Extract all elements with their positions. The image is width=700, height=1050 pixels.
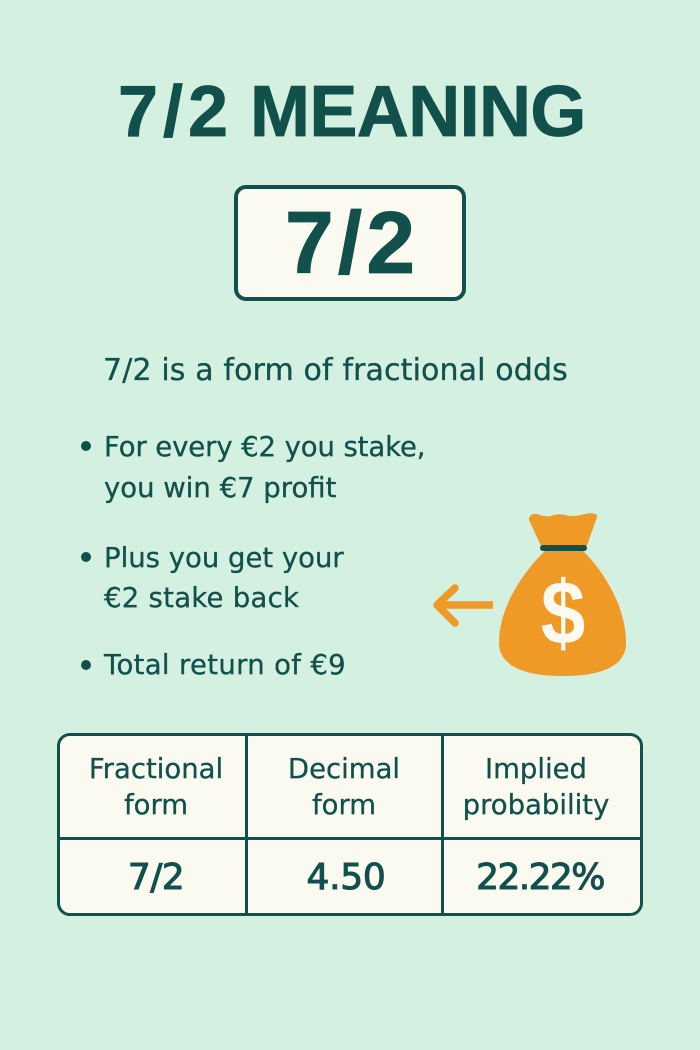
odds box: 7/2 xyxy=(285,193,419,292)
bullet two: €2 stake back xyxy=(104,582,299,614)
header: implied probability: probability xyxy=(463,789,609,821)
bullet one: For every €2 you stake, xyxy=(104,431,425,463)
title: MEANING xyxy=(250,72,586,152)
value: implied probability: 22.22% xyxy=(476,857,604,898)
header: decimal form: Decimal xyxy=(288,753,400,785)
icon: money bag: $ xyxy=(541,564,585,664)
value: fractional: 7/2 xyxy=(128,857,184,898)
intro text: 7/2 is a form of fractional odds xyxy=(103,353,568,388)
column dividers and row line xyxy=(245,736,248,913)
header: implied probability xyxy=(463,753,609,821)
header: fractional form xyxy=(89,753,223,821)
bullet two: Plus you get your xyxy=(104,542,344,574)
icon: arrow pointing left xyxy=(433,584,493,627)
bullet one: you win €7 profit xyxy=(104,472,336,504)
bullet three: Total return of €9 xyxy=(104,649,346,681)
header: implied probability: Implied xyxy=(485,753,587,785)
header: fractional form: Fractional xyxy=(89,753,223,785)
bullet one xyxy=(81,431,425,504)
odds box xyxy=(234,185,466,301)
bullet list xyxy=(81,431,425,681)
table xyxy=(57,733,643,916)
value: decimal: 4.50 xyxy=(307,857,385,898)
icon: money bag xyxy=(499,513,626,676)
header: decimal form xyxy=(288,753,400,821)
bullet two xyxy=(81,542,344,614)
title: 7/2 xyxy=(118,72,233,152)
header: decimal form: form xyxy=(312,789,376,821)
header: fractional form: form xyxy=(124,789,188,821)
